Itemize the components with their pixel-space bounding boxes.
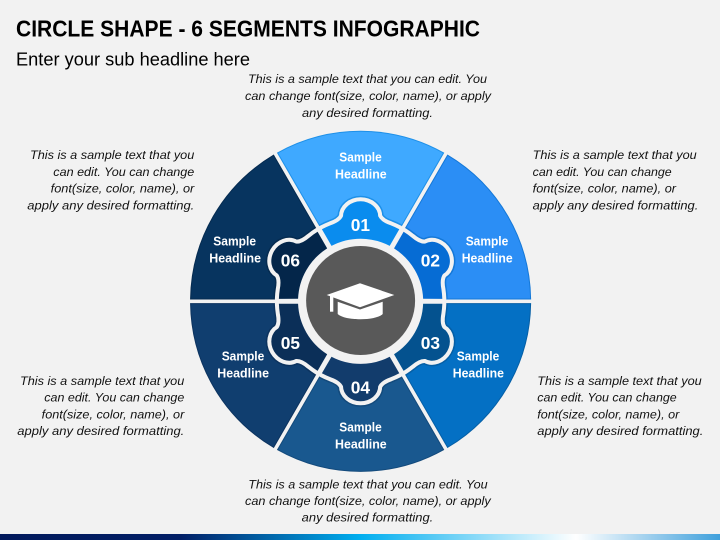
headline 5: Sample [222, 350, 264, 364]
text block: upper left: can edit. You can change [53, 167, 194, 179]
segment 2 wedge [405, 154, 532, 300]
text block: bottom: can change font(size, color, name), or apply [245, 496, 492, 508]
text block: upper right: This is a sample text that you [533, 150, 697, 162]
headline 6 [209, 235, 261, 265]
number 06: 06 [281, 251, 300, 271]
text block: top: This is a sample text that you can edit. You [248, 74, 488, 86]
text block: upper right: apply any desired formatting. [533, 200, 698, 212]
text block: upper right: font(size, color, name), or [533, 184, 677, 196]
light halo behind inner ring [255, 201, 467, 401]
text block: lower left: can edit. You can change [44, 393, 184, 405]
text block: top [245, 74, 492, 120]
subtitle: Enter your sub headline here [16, 50, 250, 70]
headline 5: Headline [217, 366, 269, 380]
headline 2 [462, 235, 513, 265]
text block: bottom: This is a sample text that you can edit. You [248, 479, 488, 491]
text block: top: any desired formatting. [302, 108, 433, 120]
headline 5 [217, 350, 269, 380]
segment 1 wedge [277, 130, 444, 226]
number 05: 05 [281, 333, 300, 353]
segment 6 wedge [190, 154, 316, 300]
text block: lower right: can edit. You can change [537, 393, 677, 405]
headline 3 [453, 350, 504, 380]
headline 2: Sample [466, 235, 508, 249]
headline 6: Headline [209, 251, 261, 265]
title: CIRCLE SHAPE - 6 SEGMENTS INFOGRAPHIC [16, 16, 480, 42]
number 04: 04 [351, 377, 370, 397]
segment 4 wedge [277, 376, 444, 472]
ring segment 06 [255, 218, 332, 307]
number 01: 01 [351, 215, 370, 235]
text block: upper right [533, 150, 698, 212]
text block: lower left: This is a sample text that you [20, 376, 185, 388]
text block: upper right: can edit. You can change [533, 167, 672, 179]
text block: upper left: This is a sample text that you [30, 150, 195, 162]
text block: lower right: apply any desired formatting. [537, 426, 703, 438]
headline 1: Headline [335, 167, 387, 181]
text block: lower left: apply any desired formatting. [17, 426, 184, 438]
text block: lower left [17, 376, 186, 438]
number 02: 02 [421, 251, 440, 271]
text block: lower right: font(size, color, name), or [537, 409, 681, 421]
text block: bottom [245, 479, 492, 525]
headline 4 [335, 421, 387, 451]
ring segment 03 [389, 295, 467, 385]
text block: upper left [27, 150, 196, 212]
headline 2: Headline [462, 251, 513, 265]
text block: lower right: This is a sample text that you [537, 376, 702, 388]
headline 3: Headline [453, 366, 504, 380]
text block: top: can change font(size, color, name), or apply [245, 91, 492, 103]
ring segment 04 [322, 357, 399, 401]
circular diagram [172, 131, 549, 471]
number 03: 03 [421, 333, 440, 353]
headline 4: Headline [335, 437, 387, 451]
text block: bottom: any desired formatting. [302, 513, 433, 525]
bottom gradient bar [0, 534, 720, 540]
headline 1 [335, 151, 387, 181]
center circle [306, 246, 415, 355]
icon: graduation cap [327, 283, 394, 319]
text block: lower left: font(size, color, name), or [42, 409, 186, 421]
headline 1: Sample [339, 151, 382, 165]
text block: upper left: apply any desired formatting. [27, 200, 194, 212]
ring segment 01 [322, 201, 399, 246]
text block: upper left: font(size, color, name), or [51, 184, 196, 196]
ring segment 02 [389, 218, 467, 307]
segment 5 wedge [190, 303, 316, 448]
headline 4: Sample [339, 421, 382, 435]
segment 3 wedge [405, 303, 532, 448]
text block: lower right [537, 376, 703, 438]
headline 3: Sample [457, 350, 499, 364]
ring segment 05 [255, 295, 332, 385]
headline 6: Sample [213, 235, 256, 249]
